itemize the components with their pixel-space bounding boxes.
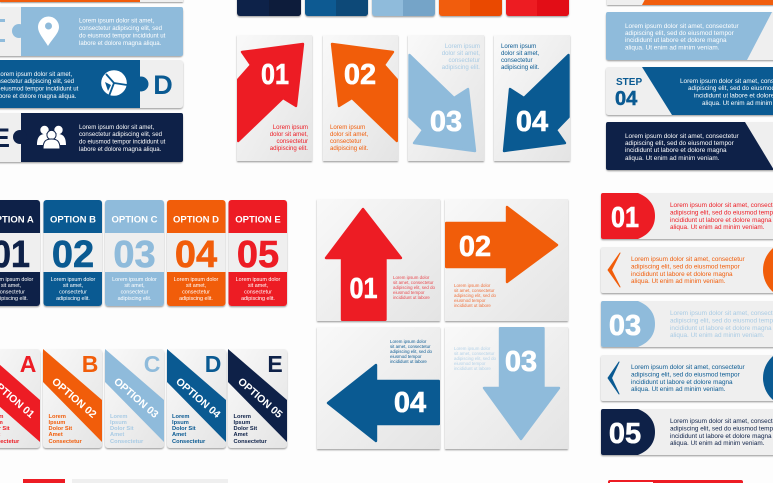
card B [43, 349, 102, 448]
arrow [410, 55, 475, 151]
card E: Consectetur [234, 439, 267, 445]
text: consectetur [448, 57, 480, 64]
text: row E: consectetur adipiscing elit, sed [79, 131, 162, 138]
card D: Dolor Sit [172, 426, 196, 432]
option B: Lorem ipsum dolor [51, 277, 96, 283]
option D: adipiscing elit. [179, 296, 213, 302]
option A: sit amet, [1, 283, 22, 289]
arrow up [326, 209, 401, 320]
row 05: aliqua. Ut enim ad minim veniam. [670, 440, 765, 447]
text: eiusmod tempor [454, 298, 486, 303]
panel: puzzle list top left [0, 0, 183, 162]
row 05: incididunt ut labore et dolore magna [670, 433, 772, 440]
step label: STEP [616, 77, 642, 88]
text: Lorem ipsum [445, 43, 480, 50]
text: eiusmod tempor [454, 361, 486, 366]
row 05 [601, 409, 773, 455]
option D: consectetur [182, 290, 210, 296]
text: dolor sit amet, [442, 50, 480, 57]
text: row C: do eiusmod tempor incididunt ut [79, 32, 166, 40]
letter D: D [153, 70, 173, 100]
arrow left [328, 365, 439, 441]
text: dolor sit amet, [501, 50, 540, 57]
card B: OPTION 02 [49, 376, 99, 421]
card E: Ipsum [234, 420, 250, 426]
card E: E [267, 351, 283, 377]
panel: diagonal option cards [0, 349, 287, 448]
text: Lorem ipsum [330, 124, 365, 131]
card B: Dolor Sit [48, 426, 72, 432]
text: Lorem ipsum dolor sit amet, consectetur [625, 133, 740, 140]
option C: adipiscing elit. [118, 296, 151, 302]
option E: Lorem ipsum dolor [236, 277, 281, 283]
option E: adipiscing elit. [241, 296, 275, 302]
text: eiusmod tempor [393, 290, 425, 295]
text: adipiscing elit, sed do eiusmod tempor [625, 140, 735, 147]
text: adipiscing elit, sed do [393, 285, 436, 290]
card D: D [205, 351, 221, 377]
arrow down [484, 328, 559, 439]
row 02: adipiscing elit, sed do eiusmod tempor [631, 264, 741, 270]
text: sit amet, consectetur [390, 344, 431, 349]
text: row E: labore et dolore magna aliqua. [79, 146, 162, 153]
text: consectetur [501, 57, 533, 64]
step number: 04 [615, 88, 638, 110]
text: dolor sit amet, [330, 131, 369, 138]
option B [44, 200, 102, 306]
arrow [238, 44, 303, 141]
option E [228, 200, 287, 306]
card C: Ipsum [110, 420, 127, 426]
text: sit amet, consectetur [454, 351, 495, 356]
option B: sit amet, [63, 283, 84, 289]
card B: Lorem [48, 414, 66, 420]
top row remnant [0, 0, 183, 2]
card D: Lorem [172, 414, 189, 420]
text: adipiscing elit, sed do [390, 349, 433, 354]
option D: Lorem ipsum dolor [174, 277, 219, 283]
panel: option cards row [0, 200, 287, 306]
row 04: incididunt ut labore et dolore magna [631, 379, 733, 386]
card D: Amet [172, 432, 186, 438]
option C: Lorem ipsum dolor [112, 277, 157, 283]
option E: consectetur [244, 290, 272, 296]
number: 04 [516, 106, 548, 138]
text: consectetur [330, 138, 362, 145]
card E: Lorem [234, 414, 251, 420]
panel: bottom left remnant [23, 479, 228, 483]
row 04 [601, 349, 773, 407]
text: eiusmod tempor [390, 354, 422, 359]
text: adipiscing elit, sed do [454, 293, 497, 298]
panel: two-tone tabs top [237, 0, 569, 16]
option C: sit amet, [124, 283, 145, 289]
option D: sit amet, [186, 283, 207, 289]
row E [0, 113, 183, 162]
row 03: aliqua. Ut enim ad minim veniam. [670, 332, 765, 339]
panel: arrow card 04 [494, 35, 570, 161]
row 02: aliqua. Ut enim ad minim veniam. [631, 278, 726, 285]
text: Lorem ipsum dolor [454, 283, 491, 288]
panel: square arrow 02 [445, 199, 568, 321]
number: 02 [459, 231, 491, 263]
card D [167, 349, 226, 448]
text: row C: consectetur adipiscing elit, sed [79, 25, 162, 32]
row 05: 05 [609, 418, 641, 450]
card C: Lorem [110, 414, 127, 420]
icon: chevron [608, 362, 619, 394]
row 02 [601, 241, 773, 299]
row 04: Lorem ipsum dolor sit amet, consectetur [631, 364, 746, 371]
step 3 remnant [607, 0, 773, 5]
row 03: incididunt ut labore et dolore magna [670, 325, 772, 332]
card A [0, 349, 40, 448]
row 03 [601, 301, 773, 347]
text: consectetur [276, 138, 308, 145]
row 04: adipiscing elit, sed do eiusmod tempor [631, 372, 741, 378]
option E: sit amet, [248, 283, 269, 289]
card C [105, 349, 164, 448]
card C: Amet [110, 432, 124, 438]
text: Lorem ipsum dolor [454, 346, 491, 351]
row D [0, 60, 183, 108]
icon: chevron [608, 253, 620, 287]
panel: square arrow 01 [317, 199, 440, 321]
option E: OPTION E [235, 214, 281, 226]
text: row E: do eiusmod tempor incididunt ut [79, 138, 166, 146]
row 01 [601, 193, 773, 239]
option D: OPTION D [173, 214, 219, 226]
card C: Dolor Sit [110, 426, 134, 432]
arrow [332, 44, 397, 141]
number: 01 [350, 273, 378, 305]
number: 03 [430, 106, 462, 138]
text: row C: labore et dolore magna aliqua. [79, 40, 162, 47]
card E: Dolor Sit [234, 426, 257, 432]
card D: OPTION 04 [173, 376, 223, 421]
text: adipiscing elit, sed do eiusmod tempor [625, 30, 735, 37]
text: incididunt ut labore [393, 295, 430, 300]
text: adipiscing elit. [330, 145, 369, 152]
icon: map pin [38, 16, 59, 46]
arrow right [446, 207, 557, 282]
option D: 04 [175, 234, 217, 276]
card B: Ipsum [48, 420, 65, 426]
option C: 03 [113, 234, 156, 276]
card A: A [20, 351, 36, 377]
option D [167, 200, 226, 306]
text: sit amet, consectetur [454, 288, 495, 293]
card D: Consectetur [172, 439, 206, 445]
text: incididunt ut labore [454, 303, 491, 308]
step row 04 [606, 67, 773, 115]
row 04: aliqua. Ut enim ad minim veniam. [631, 386, 726, 393]
panel: bottom right remnant [608, 480, 743, 483]
panel: square arrow 04 [317, 327, 440, 449]
panel: arrow card 03 [408, 35, 484, 161]
text: incididunt ut labore [454, 366, 491, 371]
text: incididunt ut labore et dolore magna [625, 147, 727, 154]
text: adipiscing elit, sed do [454, 356, 497, 361]
icon: pie chart [101, 70, 127, 96]
text: adipiscing elit. [270, 145, 308, 152]
text: adipiscing elit. [442, 64, 480, 71]
card B: Amet [48, 432, 63, 438]
panel: step list top right [606, 0, 773, 170]
row 02: Lorem ipsum dolor sit amet, consectetur [631, 256, 746, 263]
row 01: 01 [611, 202, 639, 234]
panel: arrow card 02 [323, 35, 398, 161]
step row light blue [606, 12, 773, 60]
row 01: aliqua. Ut enim ad minim veniam. [670, 224, 765, 231]
text: row E: Lorem ipsum dolor sit amet, [79, 124, 154, 131]
card B: Consectetur [48, 439, 82, 445]
text: aliqua. Ut enim ad minim veniam. [625, 155, 720, 162]
text: Lorem ipsum dolor [390, 339, 427, 344]
card B: B [82, 351, 98, 377]
option C [105, 200, 164, 306]
card C: OPTION 03 [111, 376, 161, 421]
text: Lorem ipsum dolor [393, 275, 430, 280]
card C: Consectetur [110, 439, 144, 445]
card C: C [144, 351, 160, 377]
text: Lorem ipsum [273, 124, 308, 131]
card E: OPTION 05 [235, 376, 285, 421]
option B: 02 [52, 234, 94, 276]
row 01: incididunt ut labore et dolore magna [670, 217, 772, 224]
option B: OPTION B [50, 214, 96, 226]
option C: OPTION C [112, 214, 158, 226]
option B: consectetur [59, 290, 87, 296]
option E: 05 [237, 234, 279, 276]
option C: consectetur [121, 290, 149, 296]
row 02: incididunt ut labore et dolore magna [631, 271, 733, 278]
panel: arrow card 01 [237, 35, 312, 161]
panel: square arrow 03 [445, 327, 568, 449]
option A [0, 200, 40, 306]
text: Lorem ipsum [501, 43, 536, 50]
text: aliqua. Ut enim ad minim veniam. [625, 44, 720, 52]
card E [228, 349, 287, 448]
text: row C: Lorem ipsum dolor sit amet, [79, 18, 154, 24]
card E: Amet [234, 432, 248, 438]
text: incididunt ut labore [390, 359, 427, 364]
number: 01 [261, 59, 289, 91]
row 03: 03 [609, 310, 641, 342]
text: sit amet, consectetur [393, 280, 434, 285]
number: 02 [344, 59, 376, 91]
text: incididunt ut labore et dolore magna [625, 37, 727, 44]
number: 03 [505, 346, 537, 378]
text: dolor sit amet, [270, 131, 308, 138]
step row navy [606, 122, 773, 170]
number: 04 [394, 387, 426, 419]
option B: adipiscing elit. [56, 296, 90, 302]
icon: people [37, 126, 66, 149]
row C [0, 7, 183, 56]
arrow [504, 55, 568, 151]
text: adipiscing elit. [501, 64, 540, 71]
panel: numbered list right [601, 193, 773, 455]
card D: Ipsum [172, 420, 189, 426]
text: Lorem ipsum dolor sit amet, consectetur [625, 23, 740, 30]
